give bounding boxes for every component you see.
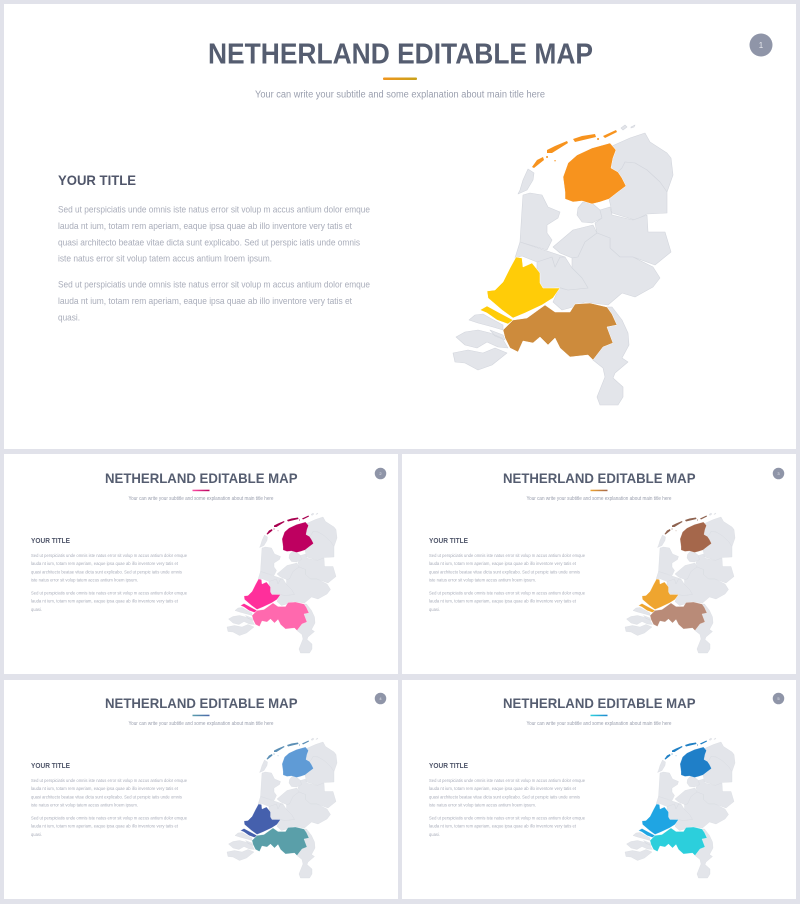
- text block: quasi.: [31, 607, 42, 612]
- text block: lauda nt ium, totam rem aperiam, eaque ipsa quae ab illo inventore very tatis et: [429, 786, 577, 791]
- title: NETHERLAND EDITABLE MAP: [503, 696, 696, 712]
- page number badge: 1: [759, 41, 764, 50]
- body text: Sed ut perspiciatis unde omnis iste natus error sit volup m accus antium dolor emque: [58, 278, 370, 290]
- text block: [429, 538, 585, 612]
- page number badge: [773, 693, 784, 704]
- text block: Sed ut perspiciatis unde omnis iste natus error sit volup m accus antium dolor emque: [429, 553, 585, 558]
- text block: lauda nt ium, totam rem aperiam, eaque ipsa quae ab illo inventore very tatis et: [31, 598, 179, 604]
- accent underline: [192, 715, 210, 716]
- text block: lauda nt ium, totam rem aperiam, eaque ipsa quae ab illo inventore very tatis et: [429, 824, 577, 828]
- panel: main slide: [4, 4, 796, 449]
- map: Netherlands muted blue: [227, 738, 337, 878]
- accent underline: [192, 490, 210, 491]
- body text: lauda nt ium, totam rem aperiam, eaque ipsa quae ab illo inventore very tatis et: [58, 295, 352, 306]
- text block: YOUR TITLE: [429, 763, 468, 770]
- text block: iste natus error sit volup tatem accus antium lroem ipsum.: [429, 802, 536, 807]
- text block: Sed ut perspiciatis unde omnis iste natus error sit volup m accus antium dolor emque: [31, 553, 187, 558]
- text block: YOUR TITLE: [429, 538, 468, 545]
- body text: lauda nt ium, totam rem aperiam, eaque ipsa quae ab illo inventore very tatis et: [58, 220, 352, 231]
- text block: Sed ut perspiciatis unde omnis iste natus error sit volup m accus antium dolor emque: [31, 590, 187, 595]
- page number badge: [375, 468, 386, 479]
- body text: quasi architecto beatae vitae dicta sunt explicabo. Sed ut perspic iatis unde omnis: [58, 236, 360, 248]
- map: Netherlands pink: [227, 513, 337, 653]
- text block: Sed ut perspiciatis unde omnis iste natus error sit volup m accus antium dolor emque: [429, 590, 585, 595]
- panel: slide muted blue: [4, 680, 398, 899]
- title: NETHERLAND EDITABLE MAP: [503, 471, 696, 487]
- text block: quasi architecto beatae vitae dicta sunt explicabo. Sed ut perspic iatis unde omnis: [31, 569, 183, 574]
- text block: iste natus error sit volup tatem accus antium lroem ipsum.: [429, 577, 536, 582]
- text block: quasi.: [31, 832, 42, 837]
- page number badge: [773, 468, 784, 479]
- accent underline: [590, 715, 608, 716]
- title: NETHERLAND EDITABLE MAP: [105, 696, 298, 712]
- text block: lauda nt ium, totam rem aperiam, eaque ipsa quae ab illo inventore very tatis et: [429, 561, 577, 566]
- text block: YOUR TITLE: [31, 763, 70, 770]
- subtitle: Your can write your subtitle and some explanation about main title here: [128, 721, 274, 727]
- text block: lauda nt ium, totam rem aperiam, eaque ipsa quae ab illo inventore very tatis et: [31, 824, 179, 828]
- text block: quasi architecto beatae vitae dicta sunt explicabo. Sed ut perspic iatis unde omnis: [429, 569, 581, 574]
- text block: quasi.: [429, 607, 440, 612]
- map: Netherlands orange: [453, 125, 673, 405]
- text block: [429, 763, 585, 837]
- page number badge: 2: [379, 471, 382, 476]
- page number badge: 4: [379, 696, 382, 701]
- text block heading: YOUR TITLE: [58, 172, 136, 188]
- subtitle: Your can write your subtitle and some explanation about main title here: [128, 496, 274, 502]
- text block: Sed ut perspiciatis unde omnis iste natus error sit volup m accus antium dolor emque: [31, 815, 187, 820]
- text block: Sed ut perspiciatis unde omnis iste natus error sit volup m accus antium dolor emque: [429, 815, 585, 820]
- panel: slide bright blue: [402, 680, 796, 899]
- text block: lauda nt ium, totam rem aperiam, eaque ipsa quae ab illo inventore very tatis et: [429, 598, 577, 604]
- accent underline: [383, 78, 417, 80]
- subtitle: Your can write your subtitle and some explanation about main title here: [526, 496, 672, 502]
- title: NETHERLAND EDITABLE MAP: [208, 38, 593, 70]
- page number badge: 5: [777, 696, 780, 701]
- text block: iste natus error sit volup tatem accus antium lroem ipsum.: [31, 577, 138, 582]
- subtitle: Your can write your subtitle and some explanation about main title here: [255, 90, 545, 100]
- text block: Sed ut perspiciatis unde omnis iste natus error sit volup m accus antium dolor emque: [429, 778, 585, 783]
- text block: iste natus error sit volup tatem accus antium lroem ipsum.: [31, 802, 138, 807]
- panel: slide pink: [4, 454, 398, 674]
- page number badge: [375, 693, 386, 704]
- map: Netherlands brown: [625, 513, 735, 653]
- body text: iste natus error sit volup tatem accus antium lroem ipsum.: [58, 252, 272, 264]
- body text: Sed ut perspiciatis unde omnis iste natus error sit volup m accus antium dolor emque: [58, 204, 370, 214]
- text block: quasi.: [429, 832, 440, 837]
- body text: [58, 204, 370, 322]
- title: NETHERLAND EDITABLE MAP: [105, 471, 298, 487]
- text block: Sed ut perspiciatis unde omnis iste natus error sit volup m accus antium dolor emque: [31, 778, 187, 783]
- text block: lauda nt ium, totam rem aperiam, eaque ipsa quae ab illo inventore very tatis et: [31, 561, 179, 566]
- text block: quasi architecto beatae vitae dicta sunt explicabo. Sed ut perspic iatis unde omnis: [31, 794, 183, 799]
- panel: slide brown: [402, 454, 796, 674]
- page number badge: [750, 34, 772, 56]
- text block: lauda nt ium, totam rem aperiam, eaque ipsa quae ab illo inventore very tatis et: [31, 786, 179, 791]
- page number badge: 3: [777, 471, 780, 476]
- map: Netherlands bright blue: [625, 738, 735, 878]
- subtitle: Your can write your subtitle and some explanation about main title here: [526, 721, 672, 727]
- text block: quasi architecto beatae vitae dicta sunt explicabo. Sed ut perspic iatis unde omnis: [429, 794, 581, 799]
- body text: quasi.: [58, 312, 80, 322]
- accent underline: [590, 490, 608, 491]
- text block: YOUR TITLE: [31, 538, 70, 545]
- text block: [31, 763, 187, 837]
- text block: [31, 538, 187, 612]
